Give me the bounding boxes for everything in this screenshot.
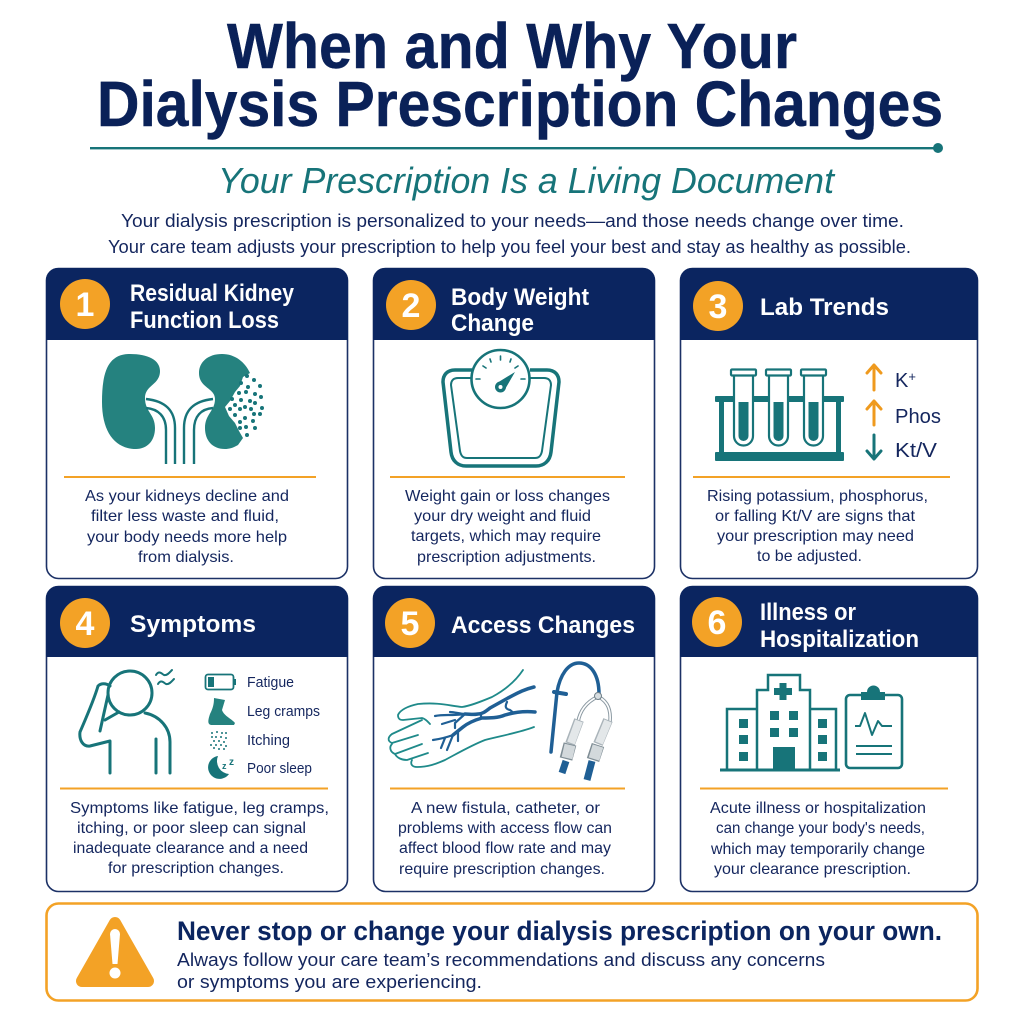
title rule with end dot — [90, 143, 943, 153]
symptom list: Fatigue — [247, 674, 294, 691]
body text 6: Acute illness or hospitalization — [710, 800, 926, 817]
warning text: Never stop or change your dialysis prescription on your own. — [177, 916, 942, 946]
body text 4: inadequate clearance and a need — [73, 840, 308, 857]
header 4: Symptoms — [130, 611, 256, 638]
body text 5 — [398, 800, 612, 878]
icon: clipboard with ecg — [846, 686, 902, 768]
body text 1: your body needs more help — [87, 529, 287, 546]
symptom list: Leg cramps — [247, 703, 320, 720]
body text 2: your dry weight and fluid — [414, 508, 591, 525]
header 1: 1 — [76, 286, 94, 324]
callout: warning — [46, 904, 978, 1000]
header 1 — [46, 268, 348, 340]
body text 6: can change your body's needs, — [716, 820, 925, 837]
header 2: Change — [451, 310, 534, 337]
header 6: Illness or — [760, 599, 856, 626]
body text 4: for prescription changes. — [108, 860, 284, 877]
icon: trend arrows and lab labels: K — [895, 370, 908, 392]
body text 2 — [405, 488, 610, 566]
icon: warning triangle — [82, 923, 148, 981]
body text 1: filter less waste and fluid, — [91, 508, 279, 525]
body text 3: or falling Kt/V are signs that — [715, 508, 916, 525]
body text 1: from dialysis. — [138, 549, 234, 566]
body text 1: As your kidneys decline and — [85, 488, 289, 505]
symptom list: z — [229, 757, 234, 768]
header 2 — [373, 268, 655, 340]
icon: person holding head — [80, 670, 174, 773]
body text 2: prescription adjustments. — [417, 549, 596, 566]
icon: arm with fistula veins — [389, 670, 535, 767]
symptom list: Itching — [247, 732, 290, 749]
intro text — [108, 211, 911, 257]
header 4 — [46, 586, 348, 657]
panel: residual kidney function loss — [46, 268, 348, 578]
warning text: or symptoms you are experiencing. — [177, 972, 482, 992]
body text 3: to be adjusted. — [757, 548, 862, 565]
header 5 — [373, 586, 655, 657]
body text 6 — [710, 800, 926, 878]
icon: trend arrows and lab labels — [867, 365, 941, 462]
panel: body weight change — [373, 268, 655, 578]
icon: weighing scale — [443, 350, 559, 466]
body text 5: require prescription changes. — [399, 861, 605, 878]
icon: trend arrows and lab labels: Kt/V — [895, 440, 938, 462]
body text 3: Rising potassium, phosphorus, — [707, 488, 928, 505]
warning text: Always follow your care team’s recommendations and discuss any concerns — [177, 950, 825, 970]
icon: hospital building — [720, 675, 840, 772]
body text 2: targets, which may require — [411, 528, 601, 545]
title: Dialysis Prescription Changes — [97, 68, 943, 140]
body text 6: your clearance prescription. — [714, 861, 911, 878]
body text 3 — [707, 488, 928, 565]
symptom list — [206, 674, 320, 779]
icon: trend arrows and lab labels: Phos — [895, 406, 941, 428]
body text 3: your prescription may need — [717, 528, 914, 545]
header 1: Function Loss — [130, 307, 279, 334]
icon: dialysis catheter — [551, 663, 610, 780]
title — [97, 10, 943, 140]
panel: illness or hospitalization — [680, 586, 978, 892]
header 3: Lab Trends — [760, 294, 889, 321]
body text 1 — [85, 488, 289, 566]
body text 4: Symptoms like fatigue, leg cramps, — [70, 800, 329, 817]
body text 2: Weight gain or loss changes — [405, 488, 610, 505]
icon: kidneys — [102, 354, 264, 464]
body text 5: affect blood flow rate and may — [399, 840, 611, 857]
header 3 — [680, 268, 978, 340]
header 5: Access Changes — [451, 612, 635, 639]
intro text: Your care team adjusts your prescription to help you feel your best and stay as healthy as possible. — [108, 237, 911, 257]
body text 4: itching, or poor sleep can signal — [77, 820, 306, 837]
panel: lab trends — [680, 268, 978, 578]
panel: symptoms — [46, 586, 348, 892]
header 2: 2 — [402, 287, 420, 325]
header 6 — [680, 586, 978, 657]
intro text: Your dialysis prescription is personalized to your needs—and those needs change over time. — [121, 211, 904, 231]
header 6: 6 — [708, 604, 726, 642]
symptom list: z — [222, 761, 227, 771]
symptom list: Poor sleep — [247, 760, 312, 777]
header 4: 4 — [76, 605, 95, 643]
header 1: Residual Kidney — [130, 280, 295, 307]
icon: trend arrows and lab labels: + — [908, 369, 916, 384]
panel: access changes — [373, 586, 655, 892]
body text 4 — [70, 800, 329, 877]
icon: test tubes in rack — [715, 370, 844, 461]
header 2: Body Weight — [451, 284, 589, 311]
header 6: Hospitalization — [760, 626, 919, 653]
body text 6: which may temporarily change — [710, 841, 925, 858]
header 5: 5 — [401, 605, 419, 643]
subtitle: Your Prescription Is a Living Document — [218, 160, 836, 201]
body text 5: A new fistula, catheter, or — [411, 800, 601, 817]
header 3: 3 — [709, 288, 727, 326]
body text 5: problems with access flow can — [398, 820, 612, 837]
title: When and Why Your — [227, 10, 797, 82]
warning text — [177, 916, 942, 992]
